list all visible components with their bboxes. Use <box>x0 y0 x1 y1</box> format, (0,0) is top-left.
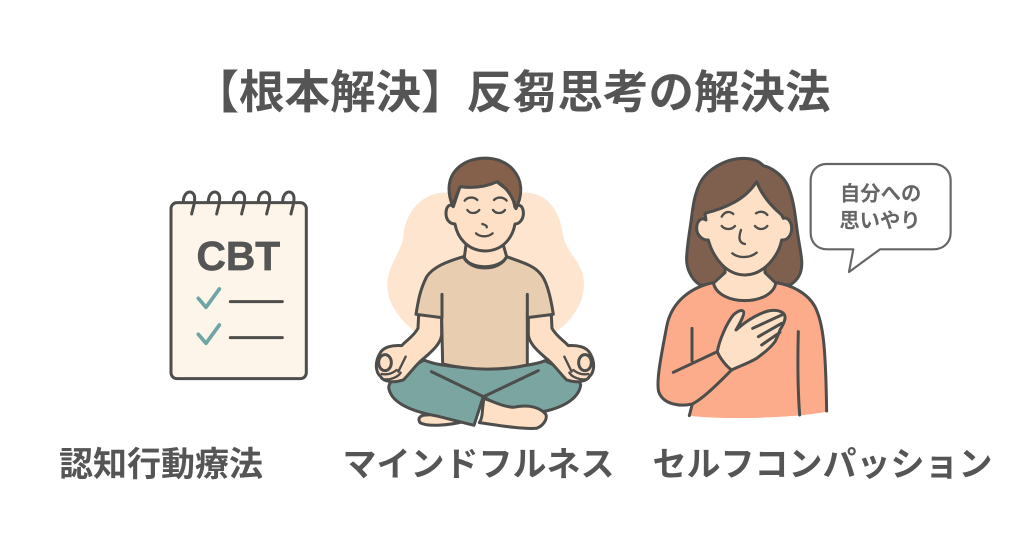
leg fold lines <box>431 371 538 397</box>
right arm and hand <box>528 315 594 382</box>
finger lines <box>753 315 782 345</box>
icon: CBT notepad <box>171 192 306 379</box>
label: mindfulness: マインドフルネス <box>342 446 614 484</box>
illustration: meditating man <box>376 158 594 428</box>
title: 【根本解決】反芻思考の解決法 <box>194 67 831 118</box>
sweater fill <box>658 283 827 418</box>
background blob <box>387 193 584 332</box>
speech bubble <box>811 164 951 272</box>
CBT label: CBT <box>197 233 280 279</box>
back foot <box>419 413 463 425</box>
face <box>697 182 792 275</box>
neck <box>464 245 507 267</box>
notepad page <box>171 203 306 379</box>
shirt sleeve seams <box>442 294 527 318</box>
illustration: woman with hand on heart <box>658 158 951 418</box>
check item 1 <box>198 289 282 307</box>
face features <box>722 212 767 257</box>
hair <box>449 158 521 209</box>
left arm and hand <box>376 315 442 382</box>
hair back <box>687 158 802 285</box>
bubble text: 自分への <box>840 183 921 206</box>
neck <box>713 267 776 301</box>
label: CBT: 認知行動療法 <box>59 446 263 484</box>
front foot <box>479 398 546 428</box>
bubble text <box>839 183 921 232</box>
hand <box>717 310 785 370</box>
face features <box>465 198 507 236</box>
check item 2 <box>198 325 282 343</box>
spiral rings <box>183 192 294 214</box>
bubble text: 思いやり <box>839 209 921 232</box>
sweater outline <box>658 283 827 416</box>
face <box>446 182 523 251</box>
shirt <box>416 257 553 369</box>
label: self compassion: セルフコンパッション <box>652 446 992 484</box>
legs <box>389 360 581 425</box>
